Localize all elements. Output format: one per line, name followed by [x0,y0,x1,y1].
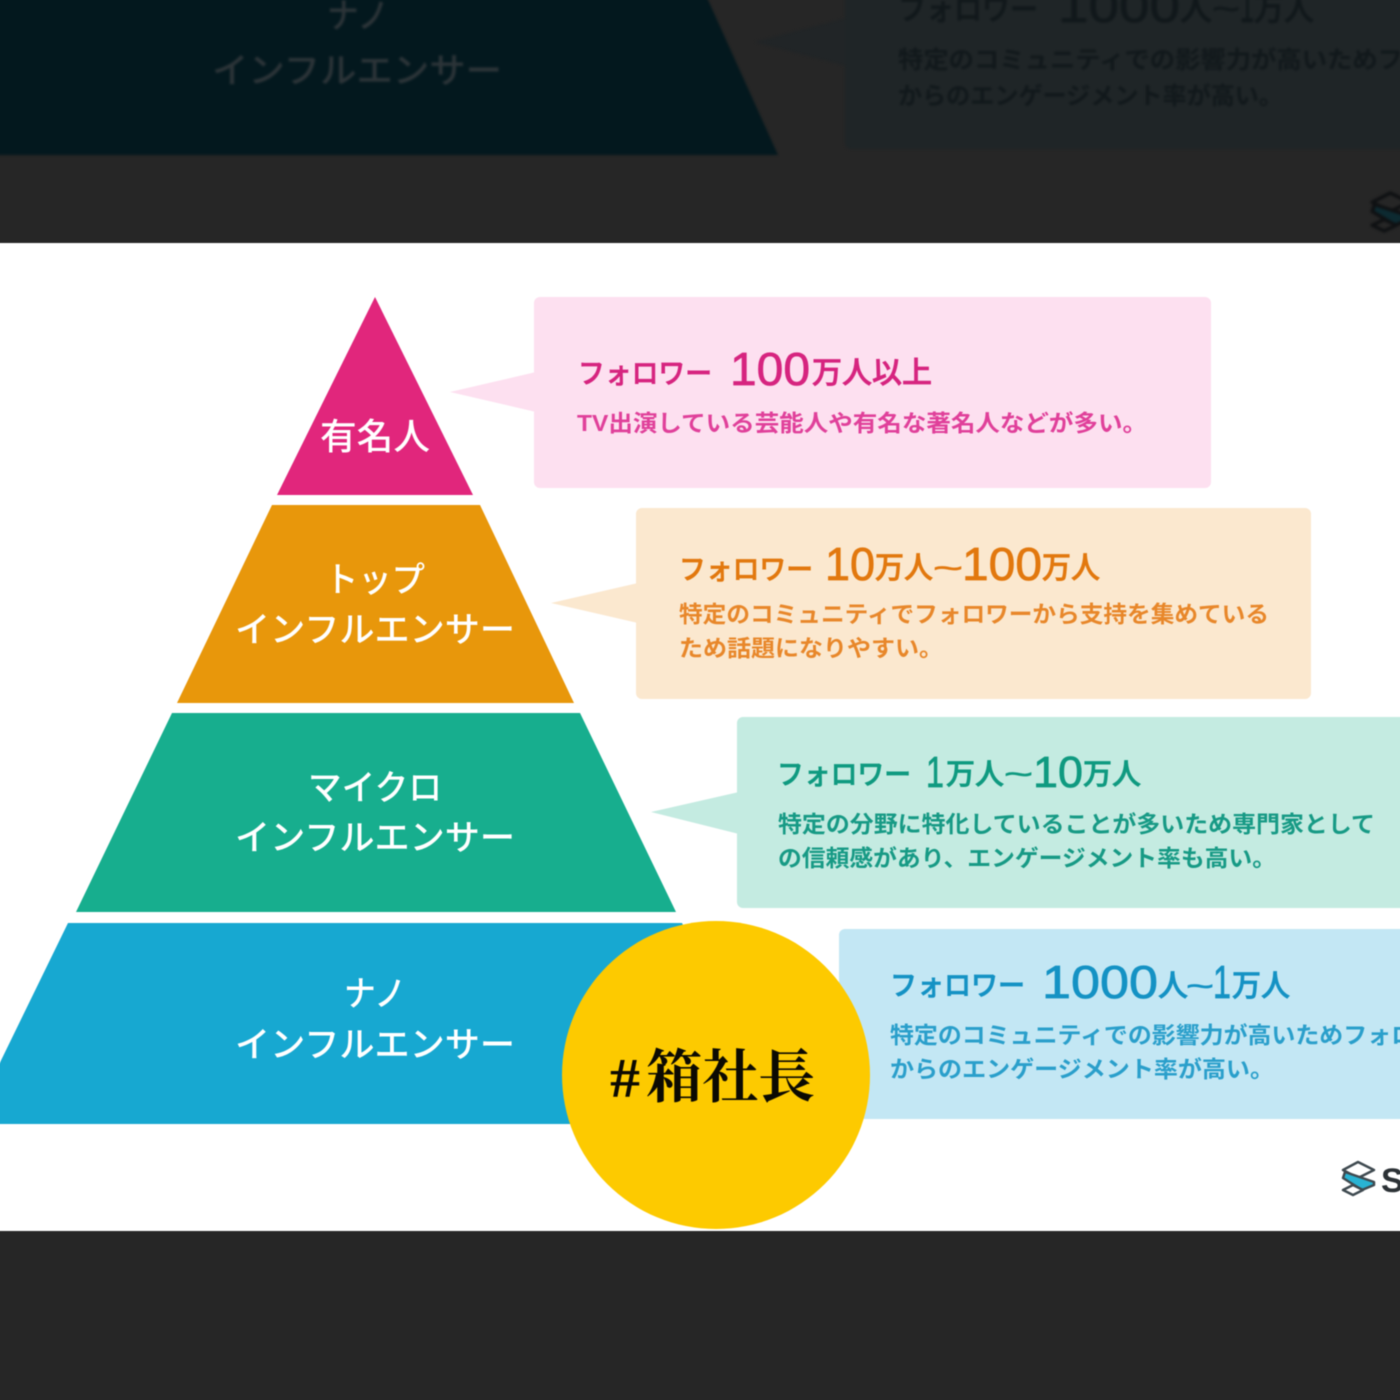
logo mark [1343,1162,1374,1195]
nano followers heading: ~ [1186,970,1214,1003]
pyramid [0,297,780,1124]
dimmed pyramid tier [0,0,778,155]
dimmed callout: からのエンゲージメント率が高い。 [898,82,1283,110]
micro followers heading: フォロワー [777,759,911,790]
tier: celebrity [277,297,473,495]
tier: top influencer [177,505,574,703]
micro followers heading: 万人 [946,759,1004,791]
micro description: の信頼感があり、エンゲージメント率も高い。 [778,845,1276,871]
celebrity description: TV出演している芸能人や有名な著名人などが多い。 [577,410,1147,436]
dimmed logo [1372,193,1400,231]
tier: nano influencer: インフルエンサー [235,1026,515,1065]
dimmed callout [755,0,1400,149]
tier: micro influencer: マイクロ [308,769,442,808]
hashtag badge [562,921,870,1229]
top followers heading: 100 [962,538,1042,590]
tier: top influencer: トップ [325,561,425,600]
top followers heading [679,538,1100,590]
top followers heading: 10 [825,538,875,590]
micro followers heading: 10 [1033,748,1083,797]
micro followers heading: 万人 [1083,759,1141,791]
tier: micro influencer: インフルエンサー [235,819,515,858]
micro description: 特定の分野に特化していることが多いため専門家として [778,811,1375,837]
dimmed callout: 特定のコミュニティでの影響力が高いためフ [898,46,1400,74]
top followers heading: ~ [933,552,963,585]
micro followers heading: ~ [1004,759,1033,791]
micro followers heading: 1 [926,748,944,797]
tier: top influencer: インフルエンサー [235,611,515,650]
top followers heading: 万人 [875,552,933,585]
celebrity followers heading: 万人以上 [812,357,932,390]
micro followers heading [777,748,1141,797]
nano followers heading: 1000 [1042,956,1158,1008]
hashtag badge: # [610,1048,640,1110]
nano followers heading: フォロワー [890,970,1025,1001]
celebrity followers heading [578,343,932,395]
nano description: からのエンゲージメント率が高い。 [890,1056,1274,1082]
nano description: 特定のコミュニティでの影響力が高いためフォロ [890,1022,1400,1048]
top followers heading: 万人 [1042,552,1100,585]
tier: micro influencer [76,713,676,912]
dimmed pyramid label: インフルエンサー [212,52,502,91]
tier: nano influencer [0,923,780,1124]
nano description [890,1022,1400,1082]
top description: 特定のコミュニティでフォロワーから支持を集めている [679,601,1269,627]
nano followers heading [890,956,1290,1008]
top description [679,601,1269,661]
celebrity followers heading: 100 [730,343,810,395]
celebrity followers heading: フォロワー [578,358,712,389]
nano followers heading: 人 [1158,970,1188,1003]
top description: ため話題になりやすい。 [679,635,943,661]
main slide [0,243,1400,1231]
micro description [778,811,1375,871]
callout: celebrity [450,297,1211,488]
dimmed pyramid label [212,0,502,91]
tier: celebrity: 有名人 [320,416,430,457]
nano followers heading: 万人 [1232,970,1290,1003]
callout: nano influencer [839,929,1400,1119]
logo [1343,1162,1400,1200]
white slide panel [0,243,1400,1231]
top followers heading: フォロワー [679,554,813,585]
callout: top influencer [551,508,1311,699]
nano followers heading: 1 [1213,956,1231,1008]
tier: nano influencer: ナノ [344,975,406,1014]
callout: micro influencer [651,717,1400,908]
hashtag badge: 箱社長 [646,1045,815,1110]
dimmed previous slide [0,0,1400,231]
